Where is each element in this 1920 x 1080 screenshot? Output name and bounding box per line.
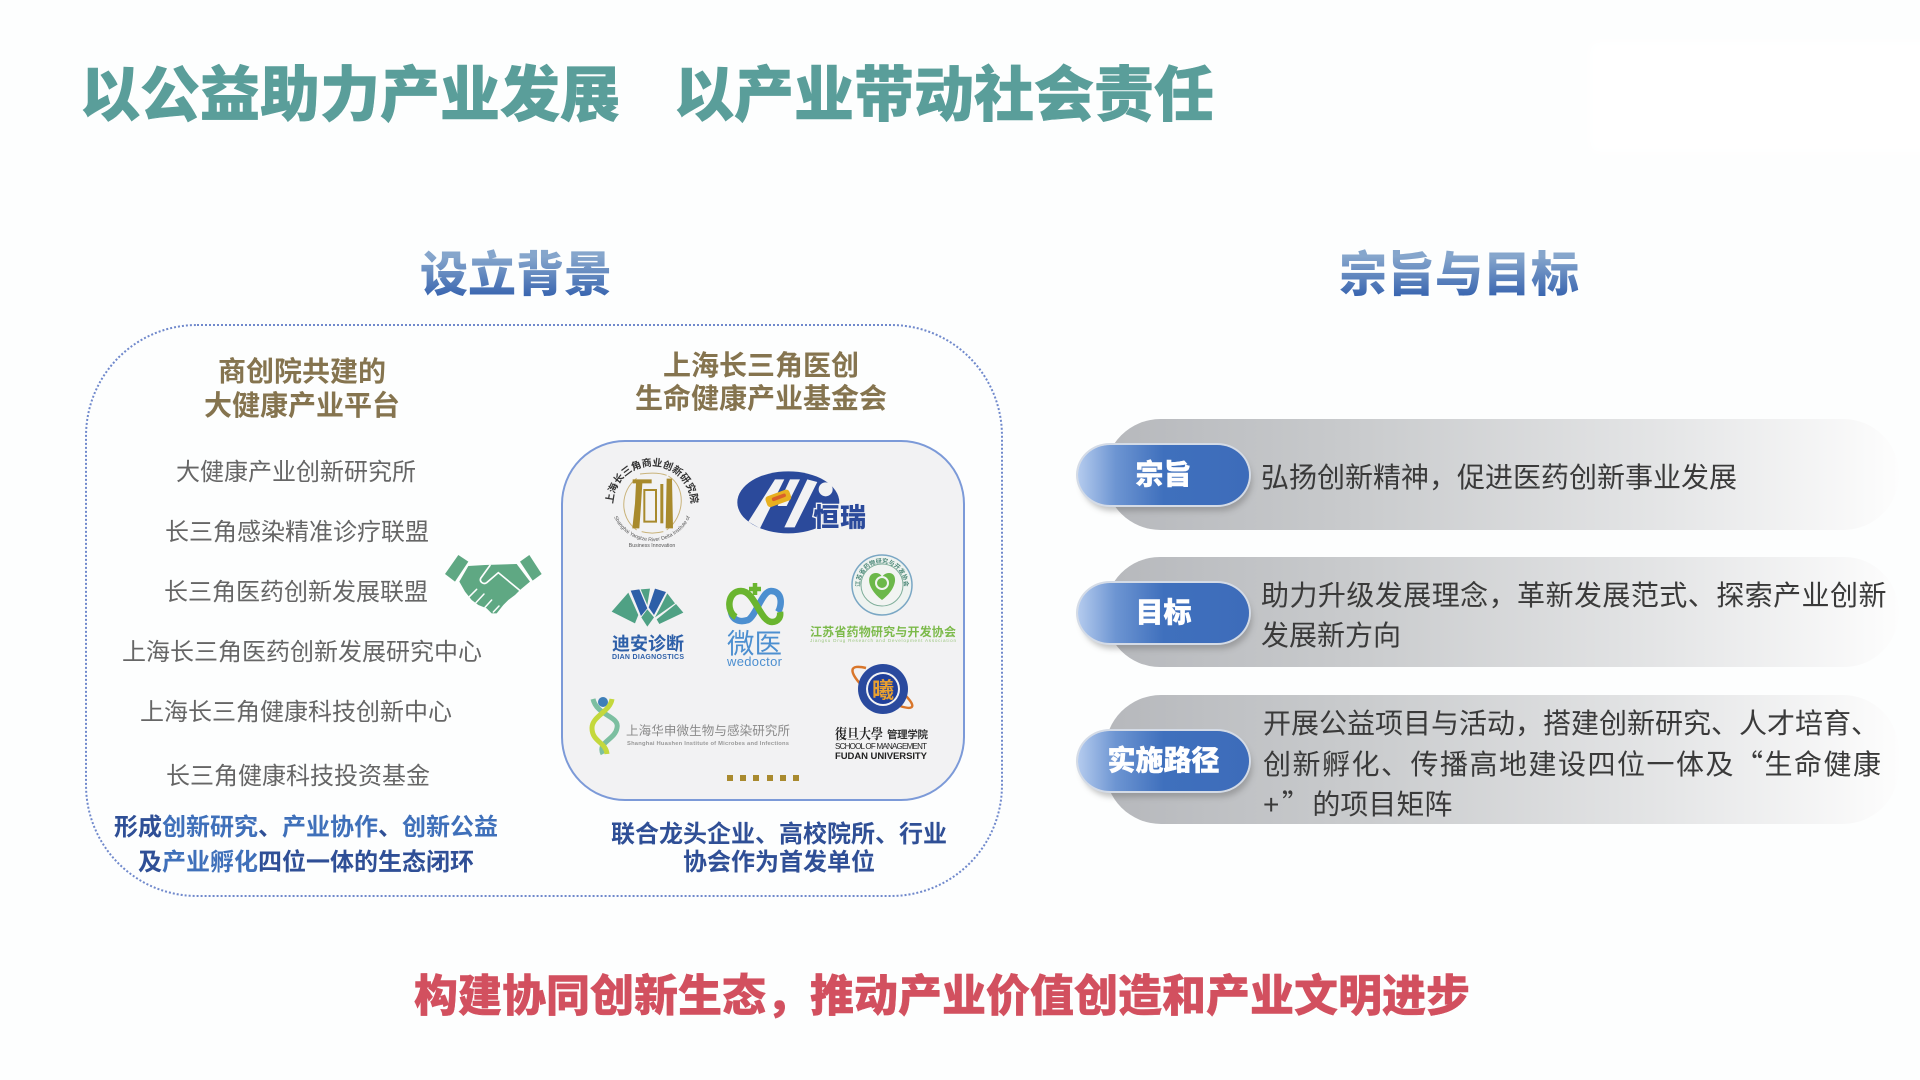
title: 以公益助力产业发展 以产业带动社会责任: [80, 62, 1214, 129]
logo: Huashen institute: Shanghai Huashen Institute of Microbes and Infections: [627, 741, 789, 747]
logo: business innovation institute: 上海长三角商业创新研究院: [605, 458, 700, 504]
platform heading: [204, 356, 400, 421]
foundation summary: 联合龙头企业、高校院所、行业: [611, 821, 947, 848]
badge: path: 实施路径: [1107, 745, 1220, 776]
icon: handshake: [445, 555, 542, 614]
bottom slogan: 构建协同创新生态，推动产业价值创造和产业文明进步: [414, 972, 1470, 1021]
logo: Huashen institute: 上海华申微生物与感染研究所: [626, 723, 790, 738]
badge: goal: 目标: [1135, 597, 1192, 628]
ellipsis dots: [727, 775, 799, 781]
platform item 4: 上海长三角医药创新发展研究中心: [122, 639, 482, 666]
row: path: [1105, 695, 1899, 824]
panel: background dotted frame: [85, 324, 1003, 897]
platform summary: [114, 814, 498, 876]
text: path: [1263, 708, 1883, 823]
platform item 3: 长三角医药创新发展联盟: [164, 579, 428, 606]
logo: WeDoctor: [726, 583, 783, 669]
logo: Hengrui: 恒瑞: [813, 503, 866, 533]
platform heading: 商创院共建的: [218, 356, 386, 387]
text: goal: [1261, 580, 1887, 651]
logo: Fudan School of Management: 曦: [872, 678, 894, 703]
logo: Dian Diagnostics: 迪安诊断: [612, 633, 684, 654]
heading: mission and goals: 宗旨与目标: [1339, 249, 1579, 302]
platform item 1: 大健康产业创新研究所: [176, 459, 416, 486]
platform heading: 大健康产业平台: [204, 390, 400, 421]
logo: Fudan School of Management: [835, 664, 928, 762]
logo: Fudan School of Management: 復旦大學: [835, 724, 883, 744]
logo: Hengrui: [737, 471, 866, 533]
heading: foundation: [635, 350, 887, 414]
logo: Huashen institute: [592, 697, 790, 754]
logo: business innovation institute: Shanghai Yangtze River Delta Institute of: [614, 515, 690, 542]
logo: WeDoctor: 微医: [727, 628, 782, 659]
badge: mission: [1078, 445, 1249, 505]
panel: platform column: [114, 356, 498, 876]
logo: Jiangsu association: Jiangsu Drug Research and Development Association: [810, 638, 956, 643]
logo: Fudan School of Management: 管理学院: [887, 728, 928, 741]
badge: mission: 宗旨: [1135, 459, 1192, 490]
row: mission: [1105, 419, 1899, 530]
panel: member logos: [561, 440, 965, 801]
text: goal: 助力升级发展理念，革新发展范式、探索产业创新: [1261, 580, 1887, 611]
text: path: +”的项目矩阵: [1263, 783, 1452, 823]
badge: path: [1078, 731, 1249, 791]
platform item 2: 长三角感染精准诊疗联盟: [165, 519, 429, 546]
heading: foundation: 生命健康产业基金会: [635, 383, 887, 414]
logo: Fudan School of Management: SCHOOL OF MANAGEMENT: [835, 742, 927, 751]
badge: goal: [1078, 583, 1249, 643]
text: mission: 弘扬创新精神，促进医药创新事业发展: [1261, 462, 1737, 493]
logo: business innovation institute: Business Innovation: [629, 543, 675, 549]
heading: background: 设立背景: [420, 249, 612, 302]
text: goal: 发展新方向: [1261, 620, 1401, 651]
foundation summary: 协会作为首发单位: [683, 849, 875, 876]
logo: Jiangsu association: [810, 554, 956, 643]
logo: Fudan School of Management: FUDAN UNIVERSITY: [835, 751, 928, 762]
logo: Jiangsu association: 江苏省药物研究与开发协会: [855, 558, 910, 586]
platform summary: 及产业孵化四位一体的生态闭环: [138, 849, 474, 876]
logo: Dian Diagnostics: DIAN DIAGNOSTICS: [612, 654, 684, 661]
logo: WeDoctor: wedoctor: [726, 654, 783, 669]
foundation summary: [611, 821, 947, 876]
text: path: 开展公益项目与活动，搭建创新研究、人才培育、: [1263, 708, 1879, 739]
row: goal: [1105, 557, 1899, 667]
logo: business innovation institute: [605, 458, 700, 549]
text: path: 创新孵化、传播高地建设四位一体及“生命健康: [1263, 742, 1883, 782]
logo: Jiangsu association: 江苏省药物研究与开发协会: [810, 624, 956, 639]
platform item 6: 长三角健康科技投资基金: [166, 763, 430, 790]
heading: foundation: 上海长三角医创: [663, 350, 859, 381]
logo: Dian Diagnostics: [612, 589, 684, 661]
platform summary: 形成创新研究、产业协作、创新公益: [114, 814, 498, 841]
platform item 5: 上海长三角健康科技创新中心: [140, 699, 452, 726]
